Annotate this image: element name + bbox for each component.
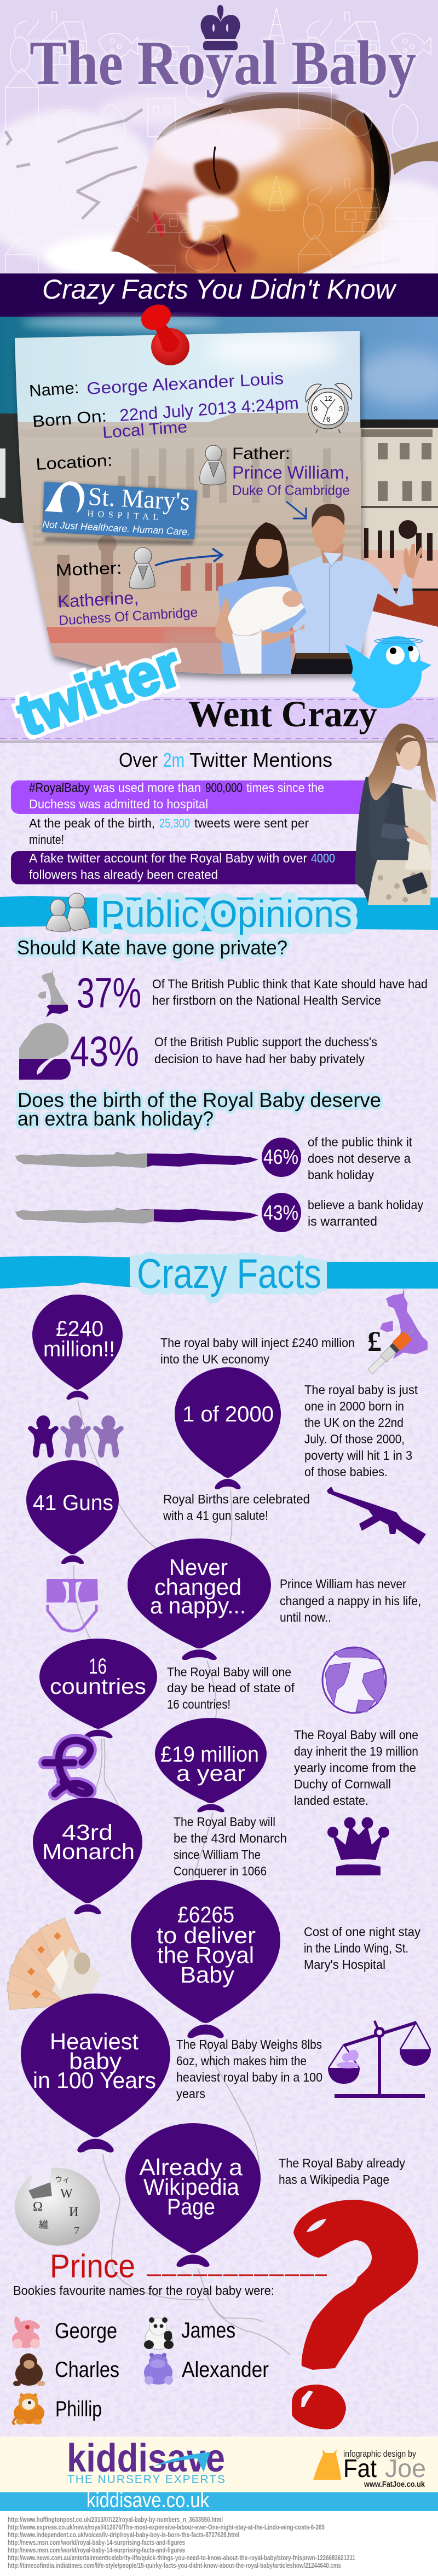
- stat box: fake account: [11, 851, 372, 884]
- balloon: already a wikipedia page: Wikipedia: [143, 2174, 240, 2200]
- name: george with pink rabbit: [12, 2316, 117, 2348]
- footer: website bar: kiddisave.co.uk: [87, 2489, 210, 2512]
- balloon: never changed a nappy: [128, 1538, 271, 1660]
- icon: monarch crown: [327, 1817, 389, 1875]
- location label: Location:: [36, 452, 113, 474]
- panel: twitter stats: [11, 749, 372, 884]
- name: george with pink rabbit: George: [55, 2319, 117, 2343]
- balloon: 41 guns: [26, 1460, 119, 1564]
- icon: two people: [46, 893, 90, 931]
- fact text: one in 2000: of those babies.: [304, 1465, 388, 1479]
- balloon: 19 million a year: £19 million: [160, 1742, 259, 1767]
- band: crazy facts: Crazy Facts: [137, 1251, 321, 1297]
- fact text: one in 2000: the UK on the 22nd: [304, 1415, 404, 1430]
- fact text: 43rd monarch: be the 43rd Monarch: [174, 1831, 287, 1845]
- baby shoulder blanket: [82, 252, 159, 273]
- logo: St Mary's Hospital: HOSPITAL: [87, 509, 159, 522]
- footer: website bar: [0, 2489, 438, 2512]
- icon: alarm clock: 9: [314, 405, 318, 413]
- heading: twitter mentions: [119, 749, 332, 771]
- note: [11, 328, 367, 676]
- blanket around baby: [0, 93, 438, 279]
- balloon: 6265 to deliver: Baby: [180, 1962, 234, 1988]
- fact text: duchy income: [294, 1728, 418, 1808]
- fact text: 43rd monarch: [174, 1815, 287, 1878]
- photo: royal couple with baby: [215, 503, 423, 674]
- stat: tweets per minute: At the peak of the birth,: [29, 816, 155, 830]
- blanket grey folds: [5, 109, 400, 268]
- heading: crazy facts: [130, 1254, 327, 1293]
- father text: Prince William,: [232, 463, 349, 482]
- hero panel: [0, 0, 438, 279]
- heading: twitter mentions: 2m: [163, 749, 185, 771]
- heading: public opinions: Public Opinions: [101, 893, 352, 935]
- balloon: 6265 to deliver: to deliver: [157, 1922, 256, 1948]
- icon: alarm clock: 12: [324, 394, 332, 403]
- icon: red question mark: [292, 2200, 418, 2429]
- father text: Father:: [232, 445, 290, 463]
- fact text: duchy income: day inherit the 19 million: [294, 1744, 418, 1758]
- icon: mother figure: [130, 547, 155, 589]
- stat: 43 percent: decision to have had her baby privately: [154, 1052, 365, 1066]
- kate: [215, 522, 307, 674]
- balloon: heaviest baby: in 100 Years: [33, 2067, 156, 2093]
- forehead: [156, 117, 282, 170]
- balloon: never changed a nappy: changed: [154, 1574, 241, 1600]
- logo: fat joe: [313, 2449, 426, 2489]
- logo: kiddisave: THE NURSERY EXPERTS: [67, 2473, 225, 2486]
- name: alexander with hippo: Alexander: [182, 2358, 269, 2382]
- stat box: fake account: A fake twitter account for the Royal Baby with over: [29, 851, 307, 865]
- name: charles with monkey: [13, 2353, 119, 2386]
- fact text: heaviest baby: 6oz, which makes him the: [176, 2054, 307, 2068]
- stat: tweets per minute: tweets were sent per: [194, 816, 309, 830]
- icon: wikipedia globe: [15, 2165, 100, 2246]
- fact text: nappy: until now..: [280, 1610, 331, 1624]
- panel: birth certificate note over palace: [0, 300, 438, 711]
- figure: 46 percent: bank holiday: [308, 1168, 374, 1182]
- figure: 43 percent: believe a bank holiday: [308, 1198, 423, 1212]
- icon: fan of ten pound notes: [7, 1918, 101, 2009]
- logo: fat joe: www.FatJoe.co.uk: [364, 2480, 425, 2489]
- figure: 43 percent: 43%: [263, 1202, 298, 1225]
- fact text: 16 countries: [167, 1665, 295, 1711]
- logo: fat joe: Joe: [385, 2454, 426, 2482]
- banner: crazy facts subtitle: Crazy Facts You Didn't Know: [42, 274, 397, 305]
- hair: [157, 93, 391, 216]
- jacket front and sleeve: [368, 788, 410, 860]
- fact text: 16 countries: 16 countries!: [167, 1697, 230, 1711]
- fact text: one in 2000: one in 2000 born in: [304, 1399, 404, 1413]
- icon: dizzy twitter bird: [345, 636, 431, 708]
- name: james with panda: James: [181, 2318, 235, 2342]
- cheek: [227, 167, 375, 265]
- balloon: heaviest baby: baby: [69, 2048, 122, 2074]
- stat box: royalbaby hashtag: was used more than: [93, 780, 201, 795]
- stat box: royalbaby hashtag: times since the: [246, 780, 324, 795]
- balloon: 6265 to deliver: [131, 1880, 280, 2038]
- fact text: wikipedia: The Royal Baby already: [279, 2156, 405, 2170]
- stat: 43 percent: Of the British Public support the duchess's: [154, 1035, 377, 1049]
- hair: [368, 724, 436, 802]
- bar: 43 percent: [15, 1208, 258, 1223]
- fact text: 43rd monarch: since William The: [174, 1848, 261, 1862]
- sources list: http://www.independent.co.uk/voices/iv-drip/royal-baby-boy-is-born-the-facts-8727628.html: [8, 2531, 239, 2539]
- logo: St Mary's Hospital: Not Just Healthcare. Human Care.: [42, 519, 190, 538]
- balloon: 6265 to deliver: £6265: [177, 1902, 234, 1927]
- fact text: wikipedia: [279, 2156, 405, 2187]
- palace sky backdrop: [0, 316, 438, 628]
- fact text: 16 countries: day be head of state of: [167, 1681, 295, 1695]
- logo: fat joe: Fat: [343, 2454, 377, 2482]
- fact text: lindo wing: Mary's Hospital: [304, 1957, 385, 1972]
- father text: Duke Of Cambridge: [232, 483, 350, 498]
- figure: 46 percent: of the public think it: [308, 1135, 413, 1149]
- william: [290, 503, 423, 674]
- balloon: 1 of 2000: [175, 1367, 281, 1489]
- fact text: gun salute: Royal Births are celebrated: [163, 1492, 310, 1506]
- balloon: 6265 to deliver: the Royal: [157, 1942, 254, 1968]
- father text: [232, 445, 350, 498]
- mother text: Duchess Of Cambridge: [59, 605, 198, 628]
- balloon: already a wikipedia page: Already a: [139, 2154, 243, 2180]
- question heading: Does the birth of the Royal Baby deserve: [18, 1089, 381, 1111]
- band: public opinions: [0, 724, 438, 935]
- icon: wikipedia globe: 維: [39, 2217, 49, 2231]
- fact text: heaviest baby: [176, 2037, 322, 2101]
- icon: wikipedia globe: Ω: [33, 2200, 43, 2214]
- balloon: 16 countries: [39, 1639, 157, 1738]
- logo: fat joe: infographic design by: [343, 2449, 416, 2459]
- name line: George Alexander Louis: [87, 369, 284, 398]
- balloon: 16 countries: countries: [50, 1675, 146, 1699]
- name: phillip with orange cat: [13, 2393, 102, 2425]
- balloon: 19 million a year: a year: [176, 1762, 245, 1786]
- logo: twitter wordmark: twitter: [10, 634, 188, 748]
- sources list: http://www.express.co.uk/news/royal/412676/The-most-expensive-labour-ever-One-night-stay-at-the-Lindo-wing-costs-6-265: [8, 2523, 325, 2531]
- balloon: already a wikipedia page: [125, 2123, 261, 2267]
- fact text: duchy income: The Royal Baby will one: [294, 1728, 418, 1742]
- born on line: 22nd July 2013 4:24pm: [119, 393, 299, 425]
- sources list: http://news.msn.com/world/royal-baby-14-surprising-facts-and-figures: [8, 2546, 185, 2554]
- icon: alarm clock: 3: [339, 405, 343, 413]
- mother text: [57, 587, 198, 628]
- nose: [187, 195, 239, 242]
- balloon: 240 million: [32, 1295, 123, 1400]
- panel: bank holiday question: [15, 1089, 423, 1232]
- icon: red pin: [137, 300, 189, 365]
- question heading: an extra bank holiday?: [18, 1108, 214, 1130]
- question heading: Should Kate have gone private?: [17, 936, 287, 959]
- icon: wikipedia globe: ウィ: [55, 2174, 70, 2185]
- dress: [368, 788, 431, 905]
- fact text: duchy income: landed estate.: [294, 1793, 368, 1808]
- fact text: duchy income: yearly income from the: [294, 1761, 416, 1775]
- torn paper background: [0, 518, 438, 711]
- panel: should kate have gone private: [17, 936, 428, 1080]
- icon: wikipedia globe: W: [60, 2187, 73, 2201]
- name: james with panda: [144, 2317, 235, 2350]
- fact text: inject 240 million: into the UK economy: [160, 1352, 269, 1366]
- heading: twitter mentions: Twitter Mentions: [189, 749, 332, 771]
- icon: wikipedia globe: И: [69, 2205, 78, 2219]
- balloon strings: [74, 1401, 290, 2354]
- balloon: already a wikipedia page: Page: [167, 2194, 215, 2219]
- fact text: one in 2000: July. Of those 2000,: [304, 1432, 405, 1446]
- question heading: [18, 1089, 381, 1130]
- fact text: one in 2000: [304, 1383, 418, 1479]
- icon: rifle: [327, 1487, 426, 1545]
- band: crazy facts: [0, 1251, 438, 1297]
- fact text: 43rd monarch: Conquerer in 1066: [174, 1864, 267, 1878]
- balloon: 19 million a year: [155, 1718, 267, 1812]
- balloon: 43rd monarch: [33, 1798, 142, 1914]
- eye crease: [194, 159, 238, 195]
- mouth: [153, 211, 163, 238]
- face: [396, 735, 420, 770]
- fact text: one in 2000: poverty will hit 1 in 3: [304, 1448, 412, 1462]
- icon: crown: [200, 5, 240, 50]
- icon: mother and baby silhouette: [19, 1023, 71, 1080]
- icon: three babies: [28, 1415, 124, 1458]
- stat: tweets per minute: 25,300: [159, 816, 190, 830]
- balloon: 16 countries: 16: [89, 1654, 107, 1679]
- balloon: 1 of 2000: 1 of 2000: [182, 1402, 274, 1426]
- figure: 43 percent: is warranted: [308, 1214, 377, 1228]
- fact text: gun salute: [163, 1492, 310, 1523]
- icon: wikipedia globe: 7: [74, 2225, 79, 2237]
- fact text: nappy: Prince William has never: [280, 1577, 406, 1591]
- stat: 37 percent: her firstborn on the National Health Service: [152, 993, 381, 1007]
- fact text: inject 240 million: The royal baby will inject £240 million: [160, 1336, 355, 1350]
- stat box: royalbaby hashtag: 900,000: [205, 780, 243, 795]
- balloon: 41 guns: 41 Guns: [33, 1491, 113, 1515]
- fact text: nappy: changed a nappy in his life,: [280, 1594, 421, 1608]
- balloon: 43rd monarch: 43rd: [62, 1821, 113, 1845]
- mother label: Mother:: [55, 558, 122, 580]
- sources list: [0, 2511, 438, 2576]
- born on line: [32, 393, 299, 442]
- arrow: to mother: [155, 549, 222, 566]
- stat: tweets per minute: [29, 816, 309, 847]
- fact text: 43rd monarch: The Royal Baby will: [174, 1815, 275, 1829]
- logo: St Mary's Hospital: [42, 480, 197, 545]
- stat box: royalbaby hashtag: Duchess was admitted to hospital: [29, 797, 208, 811]
- stat: 43 percent: [19, 1023, 377, 1080]
- icon: alarm clock: 6: [326, 415, 330, 423]
- bar: 46 percent: [15, 1152, 258, 1168]
- balloon: never changed a nappy: a nappy...: [150, 1593, 246, 1618]
- footer: logos: [0, 2437, 438, 2492]
- fact text: gun salute: with a 41 gun salute!: [163, 1508, 268, 1523]
- stat: 37 percent: Of The British Public think that Kate should have had: [152, 977, 428, 991]
- baby head: [112, 0, 402, 273]
- clutch: [402, 872, 428, 895]
- icon: pound sign: [45, 1740, 90, 1794]
- icon: UK map and syringe: £: [367, 1326, 382, 1357]
- name line: [28, 369, 284, 400]
- stat box: fake account: followers has already been created: [29, 867, 218, 882]
- fact text: lindo wing: in the Lindo Wing, St.: [304, 1941, 408, 1955]
- fact text: one in 2000: The royal baby is just: [304, 1383, 418, 1397]
- icon: UK map split: [38, 969, 68, 1017]
- icon: weighing scales: [328, 2020, 431, 2098]
- name: phillip with orange cat: Phillip: [55, 2397, 102, 2421]
- fact text: heaviest baby: years: [176, 2087, 205, 2101]
- icon: nappy: [47, 1579, 98, 1631]
- name: alexander with hippo: [144, 2353, 269, 2385]
- mother text: Katherine,: [57, 587, 139, 611]
- figure: 46 percent: 46%: [263, 1146, 298, 1169]
- stat: tweets per minute: minute!: [29, 832, 64, 847]
- fact text: heaviest baby: The Royal Baby Weighs 8lbs: [176, 2037, 322, 2052]
- born on line: Born On:: [32, 407, 107, 431]
- balloon: heaviest baby: [21, 1994, 170, 2153]
- heading: twitter mentions: Over: [119, 749, 158, 771]
- hand: [404, 827, 428, 845]
- fact text: duchy income: Duchy of Cornwall: [294, 1777, 391, 1791]
- fact text: lindo wing: [304, 1925, 420, 1972]
- sources list: http://news.msn.com/world/royal-baby-14-surprising-facts-and-figures: [8, 2538, 185, 2546]
- balloon: 43rd monarch: Monarch: [42, 1840, 135, 1864]
- band: twitter went crazy: [0, 693, 438, 743]
- sources list: http://timesofindia.indiatimes.com/life-style/people/15-quirky-facts-you-didnt-know-about-the-royal-baby/articleshow/21244640.cms: [8, 2561, 341, 2569]
- fact text: lindo wing: Cost of one night stay: [304, 1925, 420, 1939]
- fact text: wikipedia: has a Wikipedia Page: [279, 2172, 389, 2187]
- fact text: inject 240 million: [160, 1336, 355, 1366]
- lower face: [112, 189, 197, 273]
- text: bookies: Bookies favourite names for the royal baby were:: [13, 2283, 274, 2298]
- chin creases: [183, 235, 230, 256]
- icon: alarm clock: [306, 383, 352, 433]
- figure: 46 percent: [262, 1135, 413, 1182]
- back of jacket: [355, 777, 412, 905]
- stat: 43 percent: 43%: [70, 1027, 139, 1075]
- name line: Name:: [28, 379, 79, 400]
- balloon: 240 million: million!!: [43, 1337, 115, 1361]
- logo: kiddisave: kiddisave: [67, 2437, 225, 2480]
- balloon: never changed a nappy: Never: [169, 1554, 228, 1580]
- balloon: heaviest baby: Heaviest: [50, 2029, 139, 2054]
- logo: St Mary's Hospital: St. Mary's: [88, 482, 191, 516]
- arrow: to father: [286, 502, 306, 518]
- stat box: royalbaby hashtag: [11, 780, 372, 814]
- heading: prince blank: Prince: [50, 2248, 135, 2284]
- fact text: heaviest baby: heaviest royal baby in a 100: [176, 2070, 322, 2084]
- stat: 37 percent: 37%: [77, 969, 141, 1017]
- icon: father figure: [200, 445, 226, 485]
- brown wisp right: [391, 141, 438, 175]
- icon: sketched globe: [322, 1647, 386, 1713]
- balloon: 240 million: £240: [56, 1317, 103, 1341]
- name: charles with monkey: Charles: [55, 2358, 119, 2382]
- stat box: fake account: 4000: [311, 851, 335, 865]
- figure: 46 percent: does not deserve a: [308, 1151, 411, 1165]
- stat box: royalbaby hashtag: #RoyalBaby: [29, 780, 90, 795]
- fact text: 16 countries: The Royal Baby will one: [167, 1665, 291, 1679]
- stat: 37 percent: [38, 969, 428, 1017]
- sources list: http://www.huffingtonpost.co.uk/2013/07/22/royal-baby-by-numbers_n_3633550.html: [8, 2515, 223, 2523]
- figure: 43 percent: [262, 1193, 423, 1232]
- heading: went crazy: Went Crazy: [188, 693, 377, 735]
- photo: pregnant kate: [355, 724, 436, 905]
- icon: UK map and syringe: [366, 1288, 428, 1376]
- born on line: Local Time: [102, 418, 188, 442]
- fact text: nappy: [280, 1577, 421, 1624]
- banner: crazy facts subtitle: [0, 273, 438, 317]
